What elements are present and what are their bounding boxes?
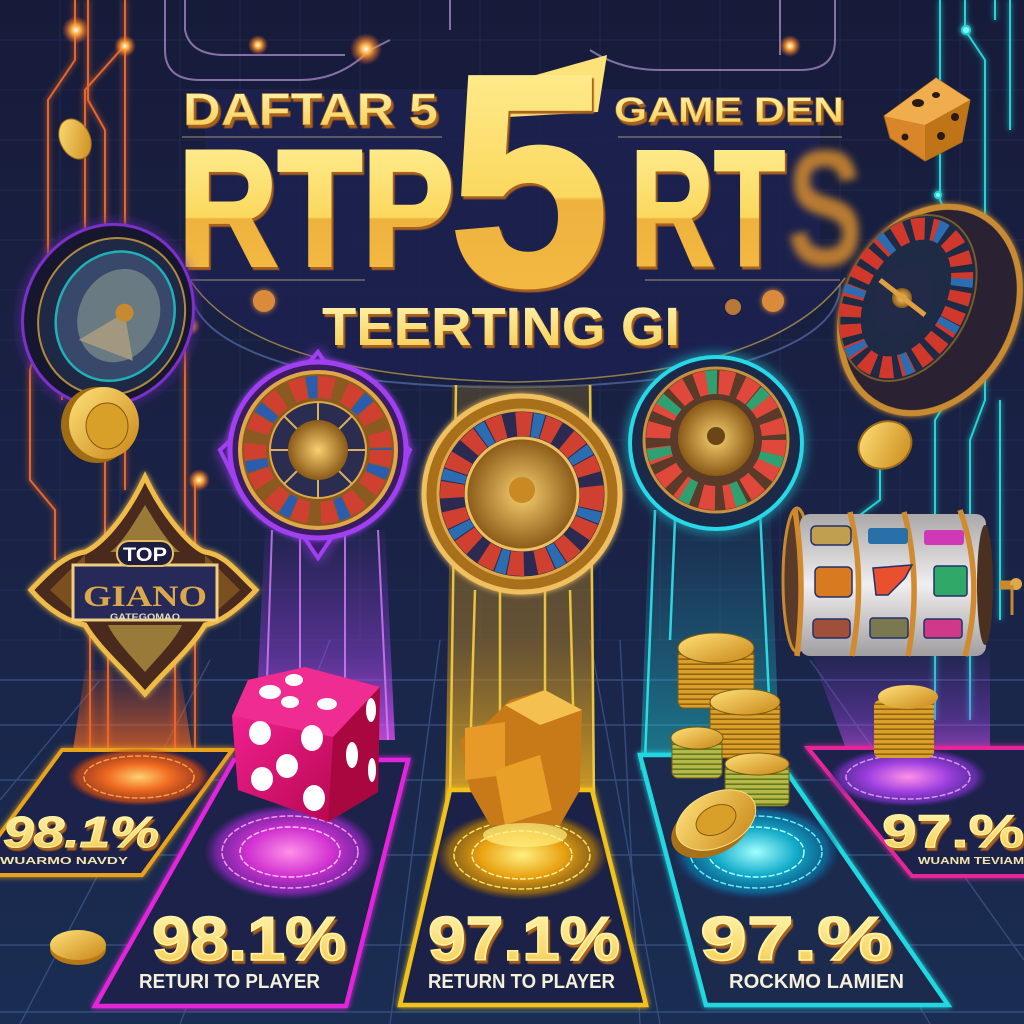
badge: TOP GIANO: GATEGOMAO (110, 612, 180, 622)
coin: bottom left (50, 930, 106, 965)
gold bars (460, 690, 582, 847)
light beam: violet (810, 650, 990, 760)
roulette: purple badge (220, 352, 410, 558)
platform 4: cyan (640, 755, 948, 1005)
glowing lights (62, 16, 801, 491)
title: DAFTAR 5: DAFTAR 5 (183, 84, 438, 135)
platform 3: gold: 97.1% (428, 905, 620, 974)
platform 3: gold: RETURN TO PLAYER (428, 971, 616, 993)
light beam: purple (255, 530, 395, 740)
light beam: cyan (640, 500, 780, 770)
slot machine (783, 508, 1022, 656)
platform 2: magenta: 98.1% (152, 905, 346, 974)
platform 4: cyan: 97.% (700, 905, 892, 974)
roulette: upper right (805, 175, 1024, 445)
title: RTP blurred right: RT (630, 116, 785, 300)
dice: pink (232, 667, 380, 822)
roulette: upper left (0, 196, 223, 434)
platform 5: pink (808, 747, 1024, 876)
platform 2: magenta: RETURI TO PLAYER (139, 971, 321, 993)
title: TEERTING GI: TEERTING GI (322, 297, 680, 357)
title: RTP blurred right: S (787, 116, 863, 300)
title: GAME DEN: GAME DEN (614, 91, 844, 130)
platform 2: magenta (95, 760, 408, 1006)
platform 5: pink: 97.% (882, 805, 1024, 857)
coin: right (851, 413, 919, 477)
circuit lines: cyan right (800, 0, 1010, 720)
coin stack: right (874, 685, 938, 758)
platform 1: orange (0, 748, 232, 875)
dice: orange (884, 78, 970, 161)
title banner (182, 90, 845, 382)
platform 4: cyan: ROCKMO LAMIEN (729, 971, 904, 993)
circuit lines: top frame (165, 0, 840, 388)
platform 3: gold (400, 790, 646, 1005)
coin: left (61, 387, 139, 463)
circuit lines: orange left (30, 0, 203, 750)
title: RTP large: RTP (178, 116, 454, 300)
platform 1: orange: WUARMO NAVDY (0, 856, 128, 867)
light beam: orange (70, 670, 195, 770)
roulette: cyan ring (630, 357, 802, 529)
light beam: gold (445, 385, 595, 810)
coin: upper left (53, 114, 97, 164)
coin: large front (662, 778, 765, 870)
platform 1: orange: 98.1% (3, 808, 159, 857)
platform 5: pink: WUANM TEVIAM (918, 856, 1024, 867)
coin stack: center (671, 633, 789, 806)
badge: TOP GIANO: GIANO (83, 580, 207, 613)
badge: TOP GIANO (31, 477, 256, 694)
title: large 5: 5 (449, 12, 609, 348)
badge: TOP GIANO: TOP (123, 545, 167, 566)
roulette: center gold (424, 396, 620, 592)
